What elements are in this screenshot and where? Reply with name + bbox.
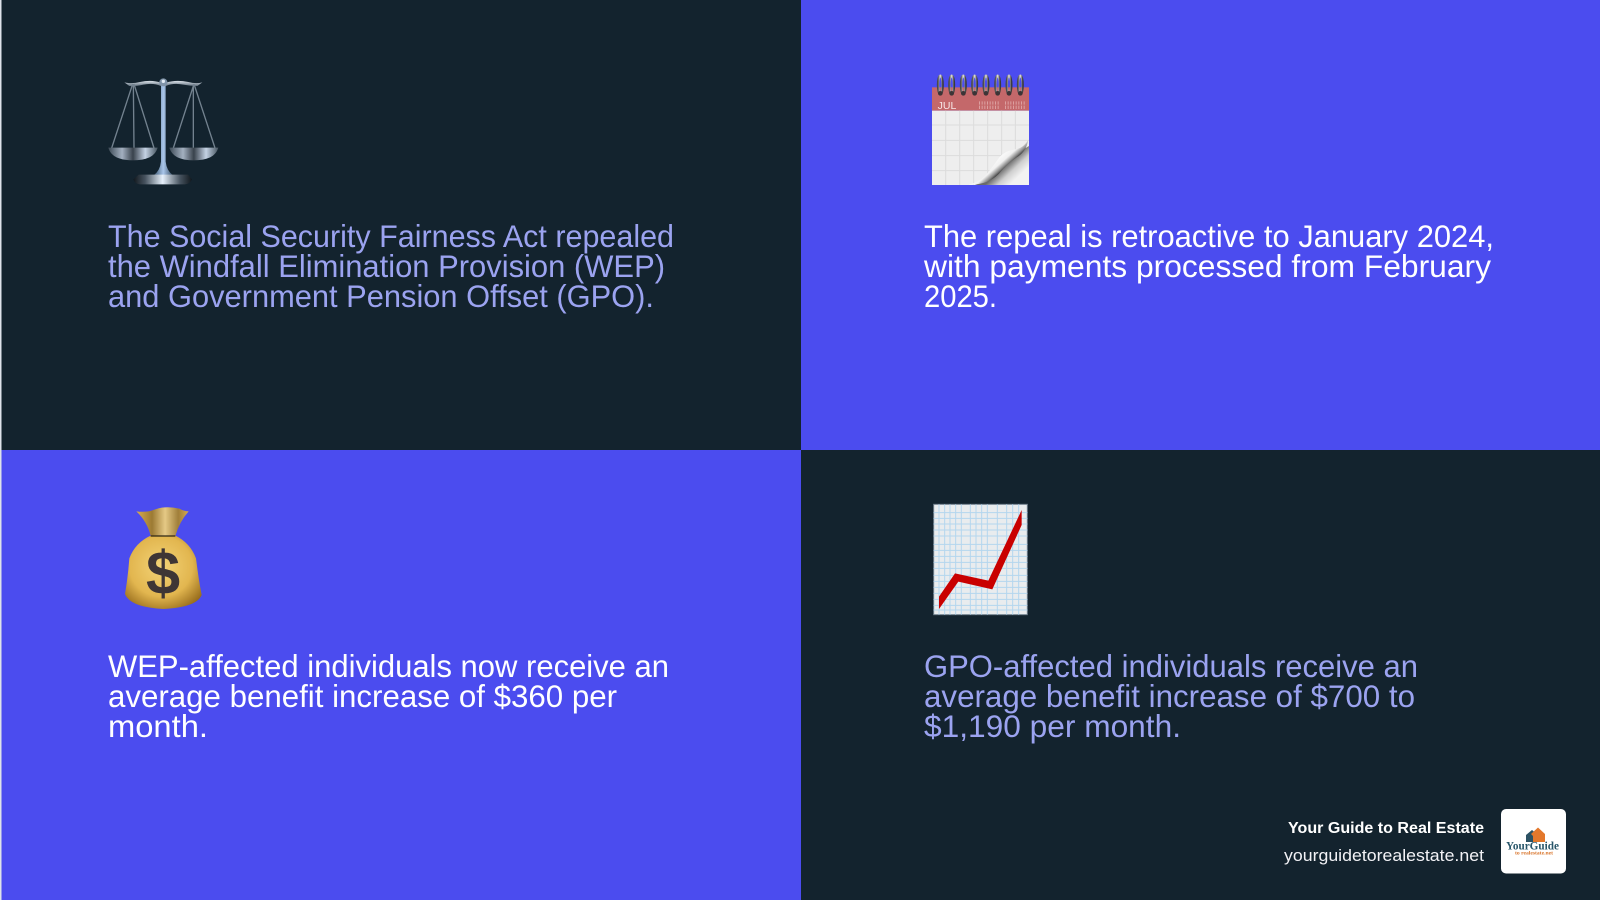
icon: money bag xyxy=(125,507,202,609)
text: repeal statement xyxy=(108,218,674,314)
text: retroactive statement: with payments processed from February xyxy=(923,248,1491,284)
text: GPO increase statement: $1,190 per month. xyxy=(924,708,1181,744)
panel: GPO benefit increase xyxy=(801,450,1600,900)
dollar sign: $ xyxy=(146,538,180,607)
icon: balance scales xyxy=(108,78,218,184)
branding footer xyxy=(1284,809,1566,874)
text: WEP increase statement: average benefit increase of $360 per xyxy=(108,678,617,714)
text: GPO increase statement: average benefit increase of $700 to xyxy=(924,678,1415,714)
text: repeal statement: and Government Pension Offset (GPO). xyxy=(108,278,654,314)
text: retroactive statement: The repeal is retroactive to January 2024, xyxy=(924,218,1494,254)
logo: YourGuide xyxy=(1506,840,1559,852)
logo xyxy=(1501,809,1566,874)
text: WEP increase statement: month. xyxy=(108,708,208,744)
text: WEP increase statement: WEP-affected individuals now receive an xyxy=(108,648,669,684)
text: retroactive statement: 2025. xyxy=(924,278,997,314)
text: GPO increase statement xyxy=(924,648,1418,744)
brand name: Your Guide to Real Estate xyxy=(1288,820,1484,837)
panel: repeal of WEP and GPO xyxy=(0,0,801,450)
text: GPO increase statement: GPO-affected individuals receive an xyxy=(924,648,1418,684)
text: repeal statement: the Windfall Elimination Provision (WEP) xyxy=(108,248,665,284)
panel: retroactive timing xyxy=(801,0,1600,450)
calendar month label: JUL xyxy=(938,101,957,112)
text: WEP increase statement xyxy=(108,648,669,744)
text: repeal statement: The Social Security Fairness Act repealed xyxy=(108,218,674,254)
icon: calendar xyxy=(932,76,1029,185)
panel: WEP benefit increase xyxy=(0,450,801,900)
brand URL: yourguidetorealestate.net xyxy=(1284,847,1484,865)
icon: rising chart xyxy=(934,504,1027,615)
text: retroactive statement xyxy=(923,218,1494,314)
logo: to realestate.net xyxy=(1515,852,1553,856)
